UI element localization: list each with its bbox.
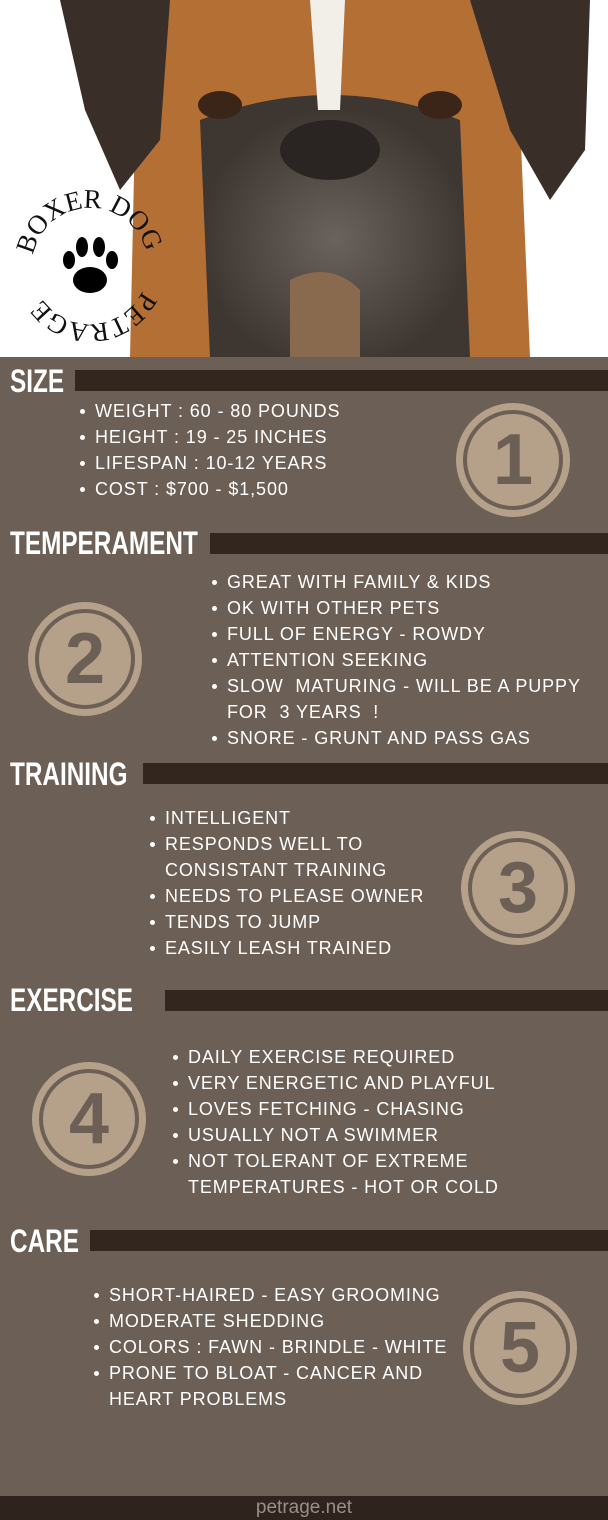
icon: number 4: 4 bbox=[69, 1079, 109, 1159]
list: training: INTELLIGENT bbox=[165, 808, 291, 828]
list: size facts: COST : $700 - $1,500 bbox=[95, 479, 289, 499]
list: care: PRONE TO BLOAT - CANCER AND bbox=[109, 1363, 423, 1383]
list: temperament: FULL OF ENERGY - ROWDY bbox=[227, 624, 486, 644]
logo: boxer dog petrage stamp bbox=[16, 190, 162, 341]
icon: number 3 bbox=[461, 831, 575, 945]
list: temperament: ATTENTION SEEKING bbox=[227, 650, 428, 670]
heading: CARE: CARE bbox=[10, 1223, 79, 1259]
icon: number 1: 1 bbox=[493, 420, 533, 500]
list: care bbox=[94, 1285, 447, 1409]
list: temperament bbox=[212, 572, 581, 748]
list: care: MODERATE SHEDDING bbox=[109, 1311, 325, 1331]
list: temperament: SLOW MATURING - WILL BE A PUPPY bbox=[227, 676, 581, 696]
list: size facts: HEIGHT : 19 - 25 INCHES bbox=[95, 427, 327, 447]
footer: petrage.net bbox=[256, 1497, 352, 1518]
list: exercise: TEMPERATURES - HOT OR COLD bbox=[188, 1177, 499, 1197]
list: exercise bbox=[173, 1047, 499, 1197]
list: exercise: VERY ENERGETIC AND PLAYFUL bbox=[188, 1073, 496, 1093]
list: exercise: NOT TOLERANT OF EXTREME bbox=[188, 1151, 468, 1171]
list: training: RESPONDS WELL TO bbox=[165, 834, 363, 854]
icon: number 5 bbox=[463, 1291, 577, 1405]
icon: number 2: 2 bbox=[65, 619, 105, 699]
heading: TRAINING: TRAINING bbox=[10, 756, 128, 792]
list: size facts bbox=[80, 401, 340, 499]
icon: number 4 bbox=[32, 1062, 146, 1176]
list: exercise: LOVES FETCHING - CHASING bbox=[188, 1099, 465, 1119]
list: care: HEART PROBLEMS bbox=[109, 1389, 287, 1409]
list: exercise: DAILY EXERCISE REQUIRED bbox=[188, 1047, 455, 1067]
list: temperament: GREAT WITH FAMILY & KIDS bbox=[227, 572, 491, 592]
icon: number 5: 5 bbox=[500, 1308, 540, 1388]
list: temperament: FOR 3 YEARS ! bbox=[227, 702, 379, 722]
list: size facts: WEIGHT : 60 - 80 POUNDS bbox=[95, 401, 340, 421]
list: training: EASILY LEASH TRAINED bbox=[165, 938, 392, 958]
heading: TEMPERAMENT: TEMPERAMENT bbox=[10, 525, 198, 561]
list: training: TENDS TO JUMP bbox=[165, 912, 321, 932]
icon: number 2 bbox=[28, 602, 142, 716]
icon: number 3: 3 bbox=[498, 848, 538, 928]
list: temperament: SNORE - GRUNT AND PASS GAS bbox=[227, 728, 531, 748]
footer bbox=[0, 1496, 608, 1520]
header photo: boxer dog bbox=[0, 0, 608, 357]
list: size facts: LIFESPAN : 10-12 YEARS bbox=[95, 453, 327, 473]
list: training bbox=[150, 808, 424, 958]
list: training: NEEDS TO PLEASE OWNER bbox=[165, 886, 424, 906]
list: exercise: USUALLY NOT A SWIMMER bbox=[188, 1125, 439, 1145]
icon: number 1 bbox=[456, 403, 570, 517]
list: care: SHORT-HAIRED - EASY GROOMING bbox=[109, 1285, 441, 1305]
heading: SIZE: SIZE bbox=[10, 363, 64, 399]
heading: EXERCISE: EXERCISE bbox=[10, 982, 133, 1018]
list: training: CONSISTANT TRAINING bbox=[165, 860, 387, 880]
list: care: COLORS : FAWN - BRINDLE - WHITE bbox=[109, 1337, 447, 1357]
list: temperament: OK WITH OTHER PETS bbox=[227, 598, 440, 618]
